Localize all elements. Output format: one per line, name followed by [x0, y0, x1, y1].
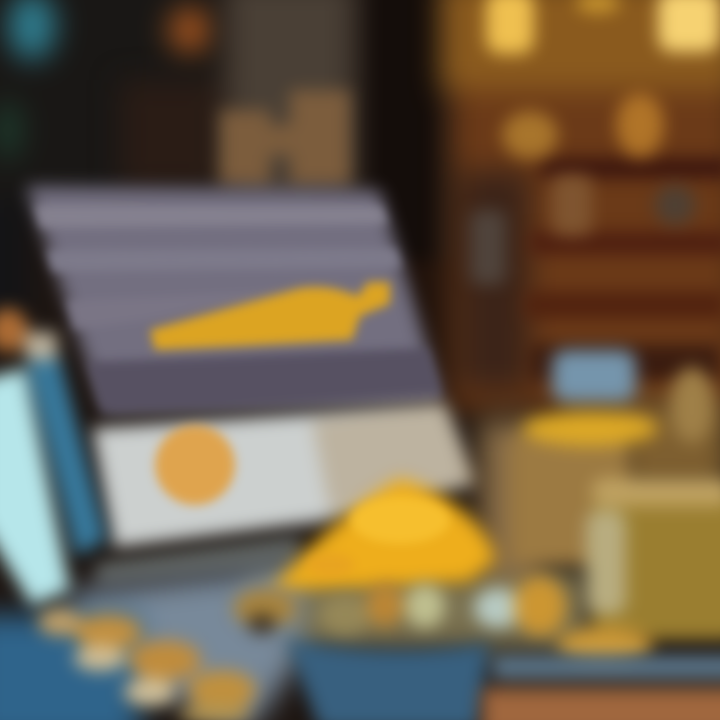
pile highlights: [306, 496, 450, 577]
background: grey-brown panel: [120, 0, 355, 195]
background: shelf boards: [525, 158, 720, 381]
laptop screen: [26, 186, 442, 412]
background: left wall: [0, 0, 220, 330]
laptop keyboard deck: [92, 402, 478, 548]
background: dark column: [372, 0, 490, 410]
pile of coins: [233, 576, 653, 663]
right gold block: [586, 478, 720, 640]
chart line on screen: [150, 282, 390, 350]
right jar: [510, 350, 714, 565]
yellow pile: [270, 478, 496, 590]
orange circle on deck: [155, 425, 235, 505]
blue bowl: [285, 638, 490, 720]
background: shelf objects: [470, 93, 695, 285]
background: blurred tan lettering: [220, 90, 350, 185]
left blue object: [0, 308, 106, 606]
screen stripes: [34, 205, 442, 412]
wooden table corner: [482, 655, 720, 720]
mid surface: [250, 400, 720, 650]
laptop front edge: [96, 534, 300, 586]
table surface: [0, 566, 300, 720]
background: glowing lights: [486, 0, 720, 54]
gold coin trail: [38, 608, 256, 720]
background: warm shelves: [440, 0, 720, 410]
